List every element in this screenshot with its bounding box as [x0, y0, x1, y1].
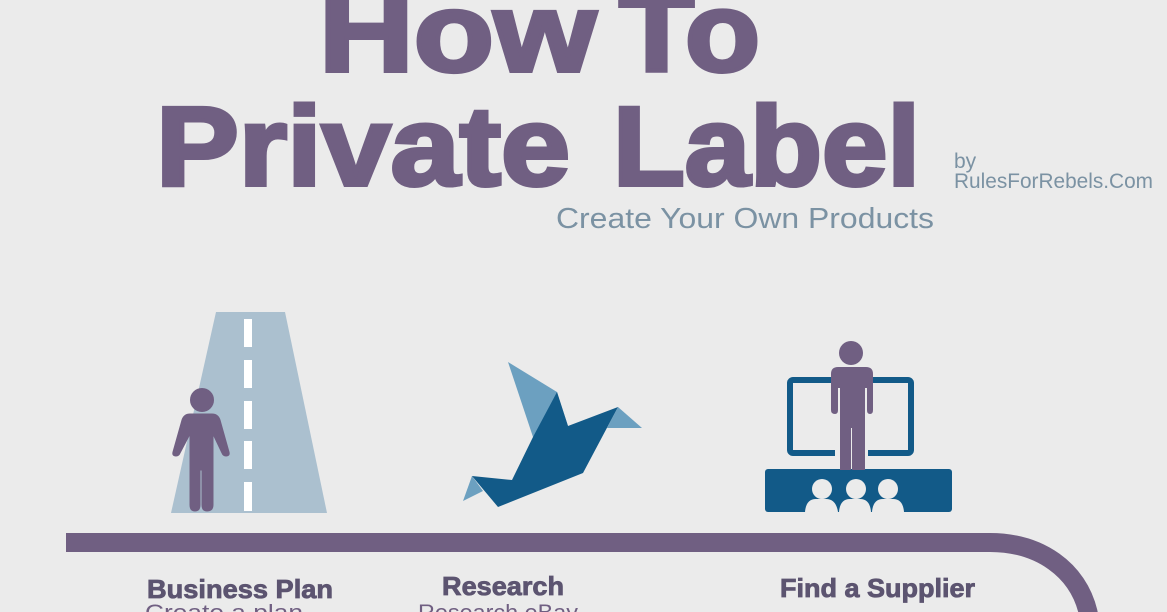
screen [790, 380, 911, 453]
audience [805, 479, 904, 512]
presenter [831, 341, 873, 470]
road [171, 312, 327, 513]
icon: road with person [171, 312, 327, 513]
step: Research: Research [442, 571, 564, 601]
subtitle: Create Your Own Products [556, 203, 934, 235]
title: Private Label: Private [156, 84, 570, 209]
byline [954, 150, 1153, 193]
person on road [173, 388, 229, 511]
byline: RulesForRebels.Com [954, 170, 1153, 193]
title: Private Label: Label [613, 84, 920, 209]
step: Find a Supplier: Find a Supplier [780, 573, 975, 603]
title: Private Label [156, 84, 920, 209]
icon: origami bird [463, 362, 642, 507]
stage [765, 469, 952, 512]
title: How To [319, 0, 760, 95]
step: Research [418, 571, 578, 612]
gap behind presenter [835, 448, 868, 457]
road dashes [244, 319, 252, 511]
byline: by [954, 150, 977, 173]
icon: presenter on stage [765, 341, 952, 512]
timeline path [66, 542, 1092, 612]
step: Business Plan: Business Plan [147, 574, 333, 604]
